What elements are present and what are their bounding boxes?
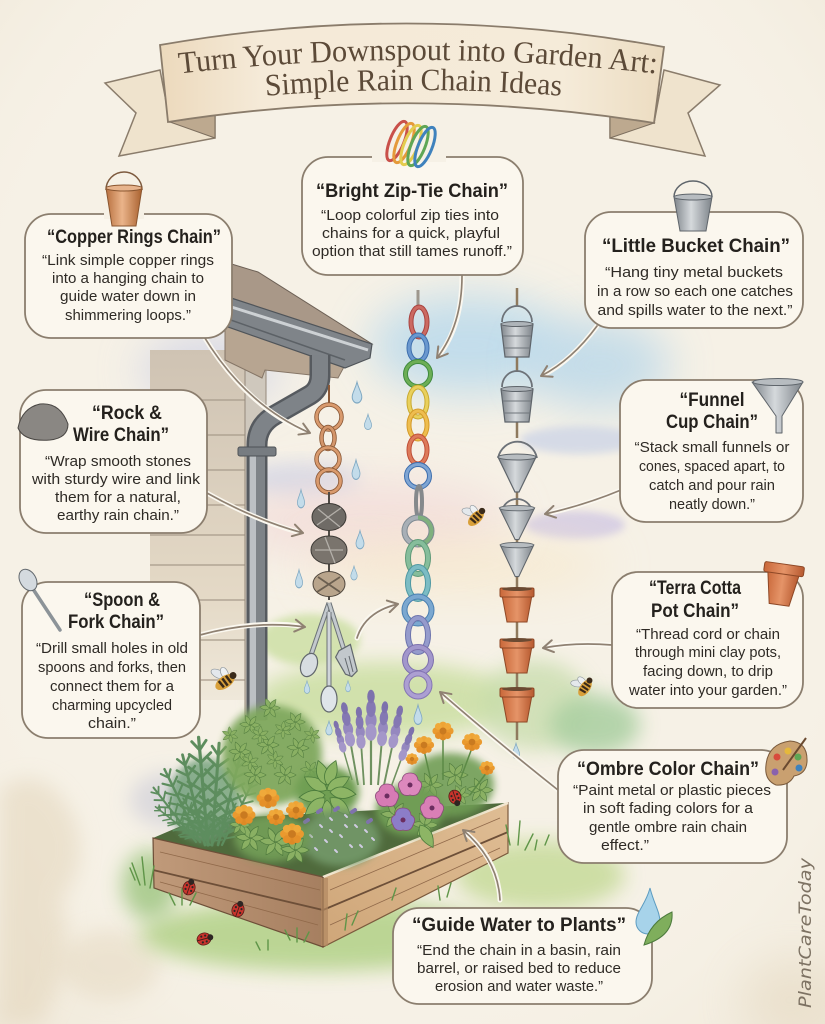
title text: Turn Your Downspout into Garden Art: <box>178 40 656 74</box>
grass tufts <box>130 821 549 950</box>
arrow: ombre <box>440 692 558 790</box>
arrow: between chains <box>357 604 398 638</box>
arrow: rock and wire <box>207 493 303 533</box>
front marigold plant <box>229 788 310 864</box>
bees <box>208 500 598 701</box>
panel: guide water to plants: “Guide Water to Plants” <box>412 915 626 936</box>
panel: terra cotta pot chain <box>612 572 803 708</box>
panel: funnel cup chain: neatly down.” <box>669 497 755 513</box>
panel: terra cotta pot chain: “Thread cord or chain <box>636 627 780 643</box>
panel: ombre color chain: “Paint metal or plastic pieces <box>573 783 771 799</box>
water drops <box>295 382 520 759</box>
icon: rock <box>18 404 68 440</box>
panel: terra cotta pot chain: “Terra Cotta <box>649 578 741 599</box>
raised wooden bed <box>153 803 508 947</box>
subtitle text: Simple Rain Chain Ideas <box>266 68 561 100</box>
icon: water drop and leaf <box>636 888 672 945</box>
panel: ombre color chain: “Ombre Color Chain” <box>577 759 759 780</box>
panel: rock and wire chain: Wire Chain” <box>73 425 169 446</box>
arrow: zip-tie <box>437 276 462 358</box>
background foliage wash <box>255 614 640 755</box>
right fold <box>610 115 654 138</box>
icon: rainbow zip ties <box>372 119 446 176</box>
panel: copper rings chain: guide water down in <box>60 289 196 305</box>
ladybugs <box>181 788 464 947</box>
oregano herb bush <box>219 698 323 805</box>
panel: bright zip-tie chain: “Loop colorful zip ties into <box>321 208 499 224</box>
panel: spoon and fork chain: “Drill small holes in old <box>36 641 188 657</box>
panel: spoon and fork chain: chain.” <box>88 716 136 732</box>
left ribbon tail <box>105 70 215 156</box>
icon: paint palette <box>766 738 807 785</box>
panel: guide water to plants <box>393 908 652 1004</box>
panel: little bucket chain: “Little Bucket Chain” <box>602 236 790 257</box>
panel: little bucket chain <box>585 212 803 328</box>
panel: rock and wire chain <box>20 390 207 533</box>
panel: spoon and fork chain <box>22 582 200 738</box>
petunias <box>375 773 444 850</box>
arrow: funnel <box>545 490 621 514</box>
panel: ombre color chain: effect.” <box>601 838 649 854</box>
panel: copper rings chain: into a hanging chain to <box>52 271 204 287</box>
watercolor sky wash <box>140 295 670 595</box>
arrow: little bucket <box>541 326 597 376</box>
panel: rock and wire chain: “Wrap smooth stones <box>45 454 191 470</box>
panel: ombre color chain <box>558 750 787 863</box>
icon: metal bucket <box>674 181 712 231</box>
lavender <box>332 690 417 791</box>
arrow: copper rings <box>203 335 310 433</box>
panel: copper rings chain: “Copper Rings Chain” <box>47 227 221 248</box>
panel: terra cotta pot chain: facing down, to drip <box>643 664 773 680</box>
watermark: PlantCareToday <box>796 857 816 1008</box>
panel: copper rings chain: “Link simple copper rings <box>42 253 214 269</box>
right ribbon tail <box>610 70 720 156</box>
panel: little bucket chain: and spills water to the next.” <box>598 303 793 319</box>
panel: little bucket chain: in a row so each one catches <box>597 284 793 300</box>
panel: spoon and fork chain: “Spoon & <box>84 590 160 611</box>
panel: funnel cup chain: catch and pour rain <box>649 478 775 494</box>
panel: rock and wire chain: earthy rain chain.” <box>57 508 179 524</box>
bright zip-tie / ombre chain <box>404 290 432 696</box>
panel: guide water to plants: “End the chain in a basin, rain <box>417 943 621 959</box>
banner body <box>160 23 664 123</box>
thyme plant <box>300 808 380 866</box>
roof and gutter <box>225 262 372 378</box>
title banner <box>104 22 722 157</box>
left fold <box>170 115 215 138</box>
panel: guide water to plants: barrel, or raised bed to reduce <box>417 961 621 977</box>
panel: ombre color chain: in soft fading colors for a <box>583 801 754 817</box>
basil plant <box>295 759 359 821</box>
house wall and siding <box>150 350 266 720</box>
panel: funnel cup chain: cones, spaced apart, to <box>639 459 785 475</box>
panel: funnel cup chain: Cup Chain” <box>666 412 758 433</box>
panel: spoon and fork chain: spoons and forks, then <box>38 660 186 676</box>
panel: bright zip-tie chain: option that still tames runoff.” <box>312 244 512 260</box>
arrow: spoon and fork <box>200 624 305 635</box>
copper rings chain <box>316 385 342 492</box>
panel: rock and wire chain: with sturdy wire and link <box>31 472 201 488</box>
rosemary plant <box>145 736 263 850</box>
icon: terra cotta pot <box>759 561 805 608</box>
icon: spoon <box>15 566 60 630</box>
panel: funnel cup chain <box>620 380 803 522</box>
bucket, funnel and pot chain <box>498 288 537 740</box>
panel: terra cotta pot chain: Pot Chain” <box>651 601 739 622</box>
panel: spoon and fork chain: Fork Chain” <box>68 612 164 633</box>
panel: ombre color chain: gentle ombre rain chain <box>589 820 747 836</box>
icon: copper bucket <box>104 172 144 226</box>
downspout <box>238 355 320 720</box>
panel: little bucket chain: “Hang tiny metal buckets <box>605 265 783 281</box>
panel: copper rings chain <box>25 214 232 338</box>
panel: funnel cup chain: “Funnel <box>680 390 744 411</box>
panel: spoon and fork chain: connect them for a <box>50 679 175 695</box>
rock and wire chain <box>311 492 347 600</box>
panel: bright zip-tie chain: chains for a quick, playful <box>322 226 500 242</box>
icon: funnel <box>752 378 803 433</box>
arrow: terra cotta <box>543 644 612 648</box>
spoon and fork chain <box>297 603 358 712</box>
panel: terra cotta pot chain: water into your garden.” <box>628 683 787 699</box>
panel: bright zip-tie chain <box>302 157 523 275</box>
panel: terra cotta pot chain: through mini clay pots, <box>635 645 781 661</box>
panel: funnel cup chain: “Stack small funnels or <box>634 440 790 456</box>
green ground wash <box>122 772 625 971</box>
panel: spoon and fork chain: charming upcycled <box>52 698 172 714</box>
panel: bright zip-tie chain: “Bright Zip-Tie Chain” <box>316 181 508 202</box>
right marigold plant <box>406 722 495 817</box>
panel: guide water to plants: erosion and water waste.” <box>435 979 603 995</box>
panel: rock and wire chain: “Rock & <box>92 403 162 424</box>
arrow: guide water <box>463 830 500 900</box>
panel: rock and wire chain: them for a natural, <box>55 490 181 506</box>
panel: copper rings chain: shimmering loops.” <box>65 308 191 324</box>
